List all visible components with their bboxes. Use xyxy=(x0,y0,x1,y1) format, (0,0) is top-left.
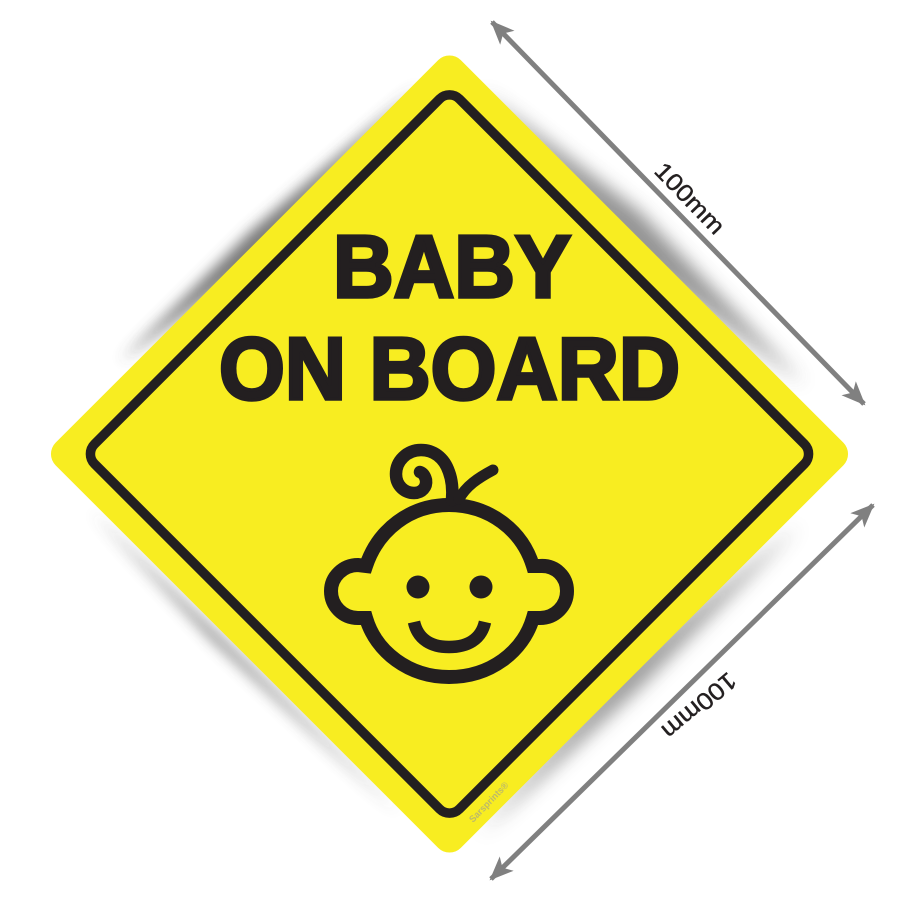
baby hair curl xyxy=(396,450,452,500)
baby eyes xyxy=(406,576,492,598)
baby hair sprout xyxy=(459,470,493,499)
label: bottom 100mm: 100mm xyxy=(656,666,741,744)
baby head and ears xyxy=(331,505,567,677)
baby smile xyxy=(414,622,485,647)
arrow: top dimension xyxy=(492,22,864,404)
sign shadow xyxy=(90,85,805,835)
label: top 100mm: 100mm xyxy=(649,157,730,240)
heading: BABY: BABY xyxy=(333,217,571,316)
arrow: bottom dimension xyxy=(491,505,873,879)
icon: baby face xyxy=(331,450,567,677)
watermark: Sarsprints® xyxy=(467,780,511,825)
heading: ON BOARD: ON BOARD xyxy=(219,319,680,418)
sign inner border xyxy=(85,89,814,819)
